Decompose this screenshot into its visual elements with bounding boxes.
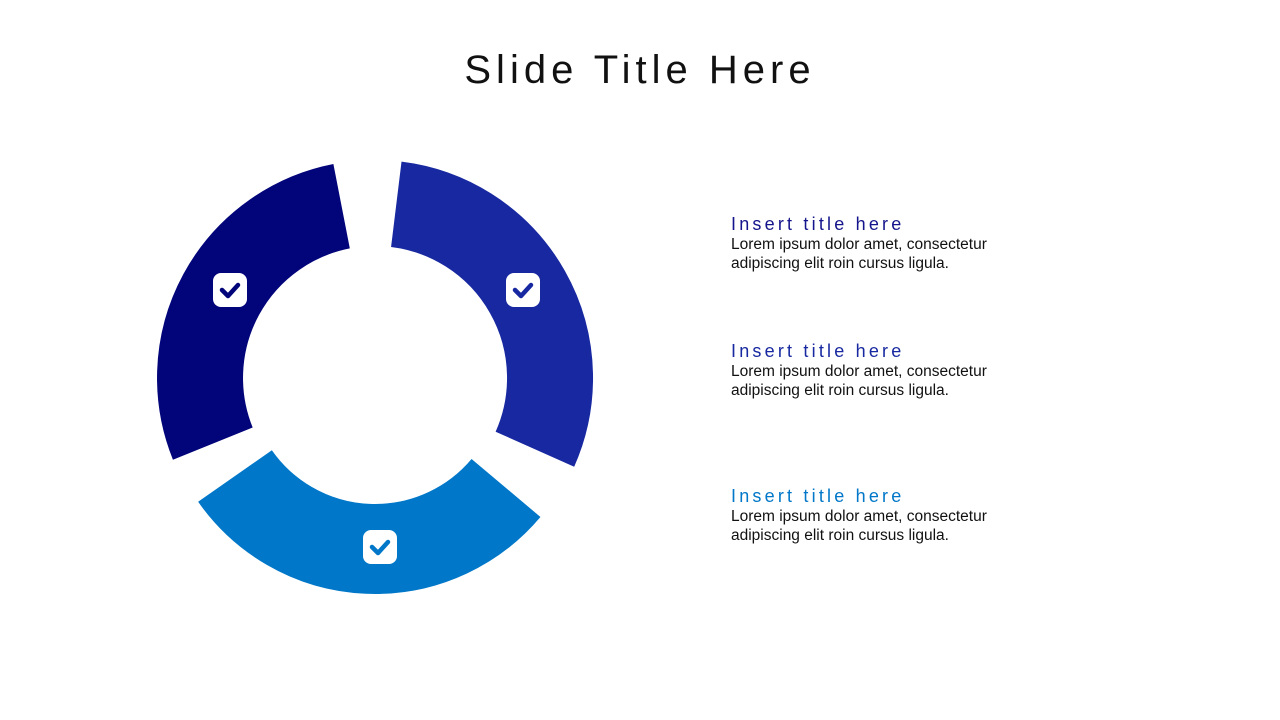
text block 1: Lorem ipsum dolor amet, consectetur	[731, 236, 987, 253]
text block 1	[731, 214, 987, 272]
segment: light blue arc	[235, 476, 506, 564]
text block 3: adipiscing elit roin cursus ligula.	[731, 527, 949, 544]
text block 1: adipiscing elit roin cursus ligula.	[731, 255, 949, 272]
text block 1: Insert title here	[731, 214, 904, 234]
segment: blue arc	[396, 204, 550, 449]
text block 2: Lorem ipsum dolor amet, consectetur	[731, 363, 987, 380]
text block 2: adipiscing elit roin cursus ligula.	[731, 382, 949, 399]
text block 3	[731, 486, 987, 544]
icon: check light blue	[363, 530, 397, 564]
text block 3: Insert title here	[731, 486, 904, 506]
icon: check blue	[506, 273, 540, 307]
text block 2: Insert title here	[731, 341, 904, 361]
segment: navy arc	[200, 206, 342, 444]
icon: check navy	[213, 273, 247, 307]
text block 3: Lorem ipsum dolor amet, consectetur	[731, 508, 987, 525]
title: Slide Title Here	[464, 48, 816, 92]
text block 2	[731, 341, 987, 399]
